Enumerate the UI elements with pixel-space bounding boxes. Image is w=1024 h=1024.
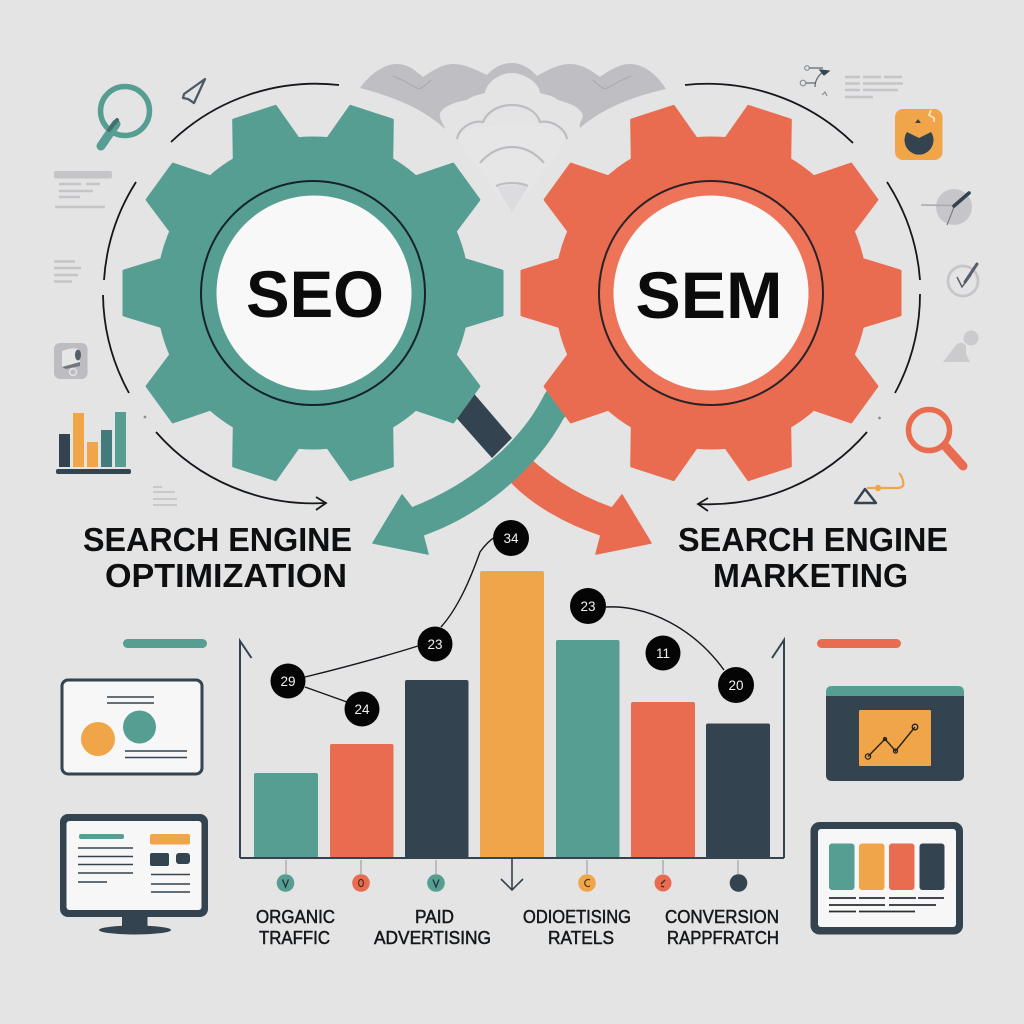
heading: search engine optimization: OPTIMIZATION (105, 557, 347, 594)
heading: search engine marketing: MARKETING (713, 557, 908, 594)
icon: triangle and amber hook (855, 473, 903, 503)
icon: speaker tile (54, 343, 88, 379)
panel: desktop monitor (60, 814, 208, 934)
arrow: teal curved arrow to SEO (373, 382, 575, 554)
category labels: PAID (415, 907, 454, 927)
category labels: TRAFFIC (259, 928, 330, 948)
data balloons: 11 (656, 646, 670, 661)
category labels: ORGANIC (256, 907, 335, 927)
category labels: RAPPFRATCH (667, 928, 779, 948)
connector: dark band (453, 389, 512, 458)
heading: search engine marketing: SEARCH ENGINE (678, 521, 948, 558)
data balloons: 24 (354, 702, 370, 717)
text block: small grey lines below bar chart (153, 487, 177, 505)
panel: tablet with colour swatches (810, 822, 963, 934)
accent bar: teal (123, 639, 207, 648)
orbit arcs around SEM gear (685, 84, 920, 511)
category labels: CONVERSION (665, 907, 779, 927)
category labels (256, 907, 779, 948)
icon: orange magnifier (908, 410, 963, 466)
icon: node path tool (800, 66, 829, 96)
gear: SEM: SEM (636, 258, 782, 332)
icon: paper plane (183, 79, 205, 103)
panel: dark window with line chart (826, 686, 964, 781)
heading: search engine optimization (83, 521, 352, 594)
data balloons: 34 (503, 531, 519, 546)
data balloons: 20 (728, 678, 744, 693)
category labels: RATELS (548, 928, 614, 948)
category labels: ADVERTISING (374, 928, 491, 948)
data balloons: 29 (280, 674, 296, 689)
icon: small bar chart (56, 412, 131, 474)
heading: search engine optimization: SEARCH ENGINE (83, 521, 352, 558)
icon: teal magnifier (100, 86, 150, 146)
bar chart (240, 571, 784, 858)
arrow: orange curved arrow to SEM (505, 445, 651, 554)
icon: grey person (943, 330, 978, 362)
icon: orange app tile (895, 109, 942, 160)
axis ticks and category dots (277, 859, 747, 892)
gear: SEO (124, 103, 502, 483)
orbit arcs around SEO gear (103, 84, 339, 510)
text block: grey placeholder lines upper left (54, 171, 112, 207)
heading: search engine marketing (678, 521, 948, 594)
panel: slide card with circles (62, 680, 202, 774)
icon: check circle with pen (948, 264, 978, 296)
gear: SEO: SEO (246, 257, 384, 331)
gear: SEM (522, 103, 900, 483)
data line connectors (305, 537, 724, 702)
text block: grey lines upper right (845, 77, 903, 97)
data balloons: 23 (427, 637, 443, 652)
data balloons (270, 520, 754, 726)
category labels: ODIOETISING (523, 907, 631, 927)
text block: grey placeholder lines mid left (54, 262, 81, 282)
accent bar: orange (817, 639, 901, 648)
icon: clock (921, 189, 972, 225)
top decoration: grey wings and cloud fan (360, 63, 666, 214)
data balloons: 23 (580, 599, 596, 614)
